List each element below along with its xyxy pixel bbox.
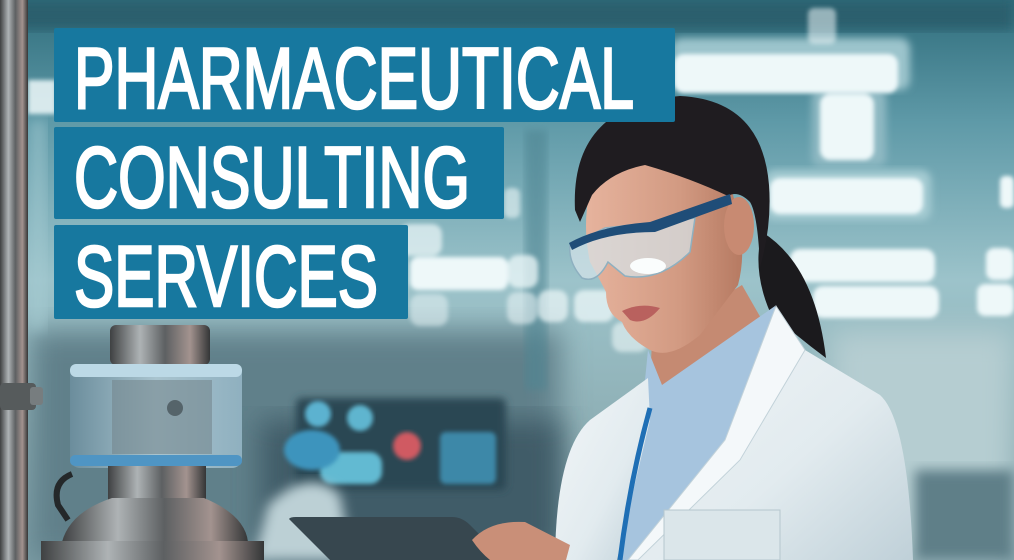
face [586, 162, 742, 353]
safety glasses [569, 194, 732, 279]
title line 2 banner: CONSULTING [74, 130, 470, 226]
steel and glass equipment [41, 325, 264, 560]
blurred monitors and background worker [254, 398, 506, 560]
lab coat right side [628, 306, 913, 560]
lab coat left side [555, 378, 650, 560]
ear [724, 197, 754, 255]
lanyard [620, 408, 650, 560]
lips [622, 306, 660, 322]
hair [575, 96, 770, 268]
hand [472, 522, 570, 560]
neck [650, 285, 762, 405]
title line 3 banner: SERVICES [74, 229, 378, 325]
blue shirt [622, 306, 782, 560]
ceiling lights [28, 8, 1014, 352]
ponytail [758, 232, 826, 358]
woman in lab coat with safety glasses and tablet [289, 96, 913, 560]
title line 1 banner: PHARMACEUTICAL [74, 31, 634, 127]
title [54, 28, 675, 325]
tablet [289, 517, 505, 560]
vertical steel pole [0, 0, 43, 560]
